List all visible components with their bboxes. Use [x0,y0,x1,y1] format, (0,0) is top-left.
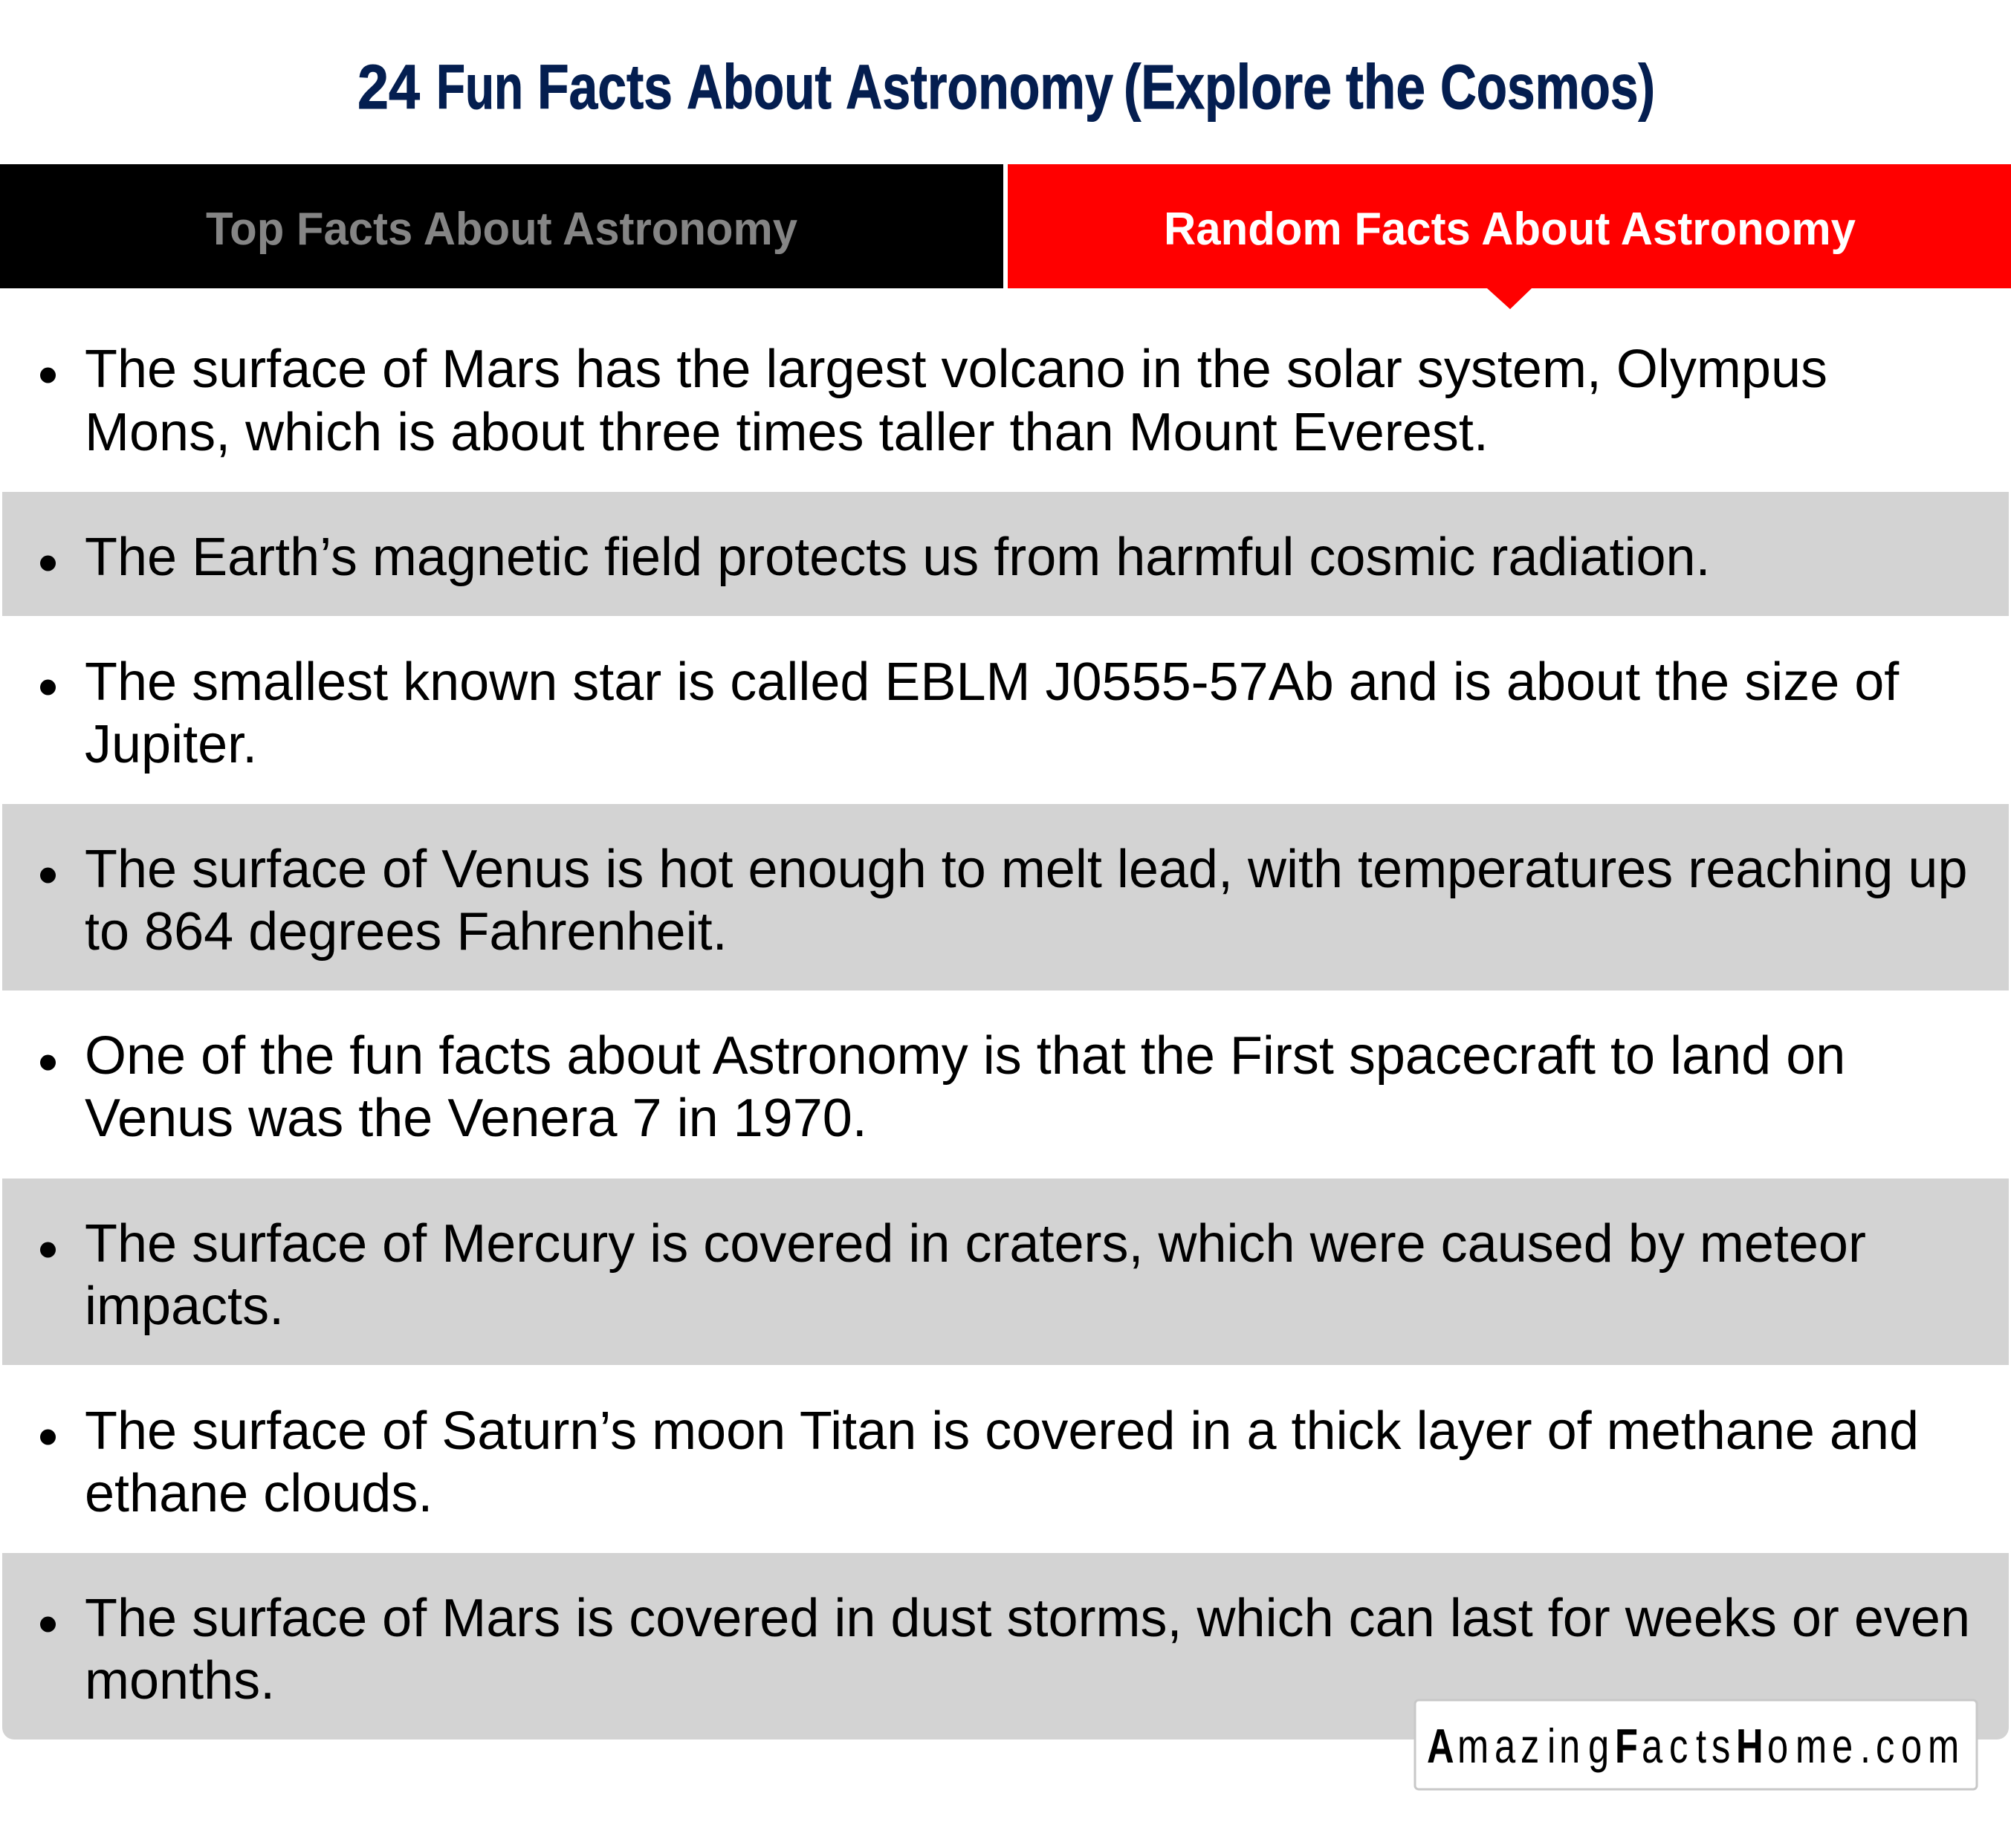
watermark: F [1615,1719,1638,1773]
fact 5: Venus was the Venera 7 in 1970. [85,1089,867,1148]
title: the [1346,52,1425,122]
fact 5 [40,1026,1845,1148]
fact 6 [2,1178,2009,1365]
fact 1: The surface of Mars has the largest volcano in the solar system, Olympus [85,340,1827,399]
watermark: mazing [1457,1719,1609,1773]
fact 5: One of the fun facts about Astronomy is that the First spacecraft to land on [85,1026,1845,1086]
fact 2: The Earth’s magnetic field protects us from harmful cosmic radiation. [85,528,1711,587]
tab: top facts [0,164,1003,288]
fact 6: impacts. [85,1277,284,1336]
watermark: acts [1642,1719,1730,1773]
fact 7 [40,1401,1919,1523]
fact 6: The surface of Mercury is covered in craters, which were caused by meteor [85,1214,1866,1274]
title: 24 [357,52,420,122]
fact 4: to 864 degrees Fahrenheit. [85,902,728,962]
fact 2 [2,492,2009,616]
fact 8 [2,1553,2009,1740]
fact 3: The smallest known star is called EBLM J0555-57Ab and is about the size of [85,652,1900,712]
title: Cosmos) [1440,52,1655,122]
title: (Explore [1124,52,1332,122]
fact 8: months. [85,1651,275,1711]
title [357,52,1655,122]
watermark: H [1736,1719,1764,1773]
watermark [1415,1700,1977,1789]
fact 3: Jupiter. [85,715,257,774]
tab: random facts [1008,164,2011,309]
fact 7: ethane clouds. [85,1464,433,1523]
fact 4 [2,804,2009,991]
title: Astronomy [846,52,1113,122]
title: Facts [537,52,673,122]
watermark: A [1427,1719,1454,1773]
title: About [687,52,832,122]
watermark: ome.com [1767,1719,1959,1773]
fact 1: Mons, which is about three times taller than Mount Everest. [85,403,1489,462]
fact 7: The surface of Saturn’s moon Titan is covered in a thick layer of methane and [85,1401,1919,1461]
fact 8: The surface of Mars is covered in dust storms, which can last for weeks or even [85,1589,1970,1648]
tab: top facts: Top Facts About Astronomy [206,204,797,255]
title: Fun [436,52,523,122]
fact 1 [40,340,1827,462]
tab: random facts: Random Facts About Astronomy [1164,204,1856,255]
fact 3 [40,652,1900,774]
fact 4: The surface of Venus is hot enough to melt lead, with temperatures reaching up [85,840,1968,899]
